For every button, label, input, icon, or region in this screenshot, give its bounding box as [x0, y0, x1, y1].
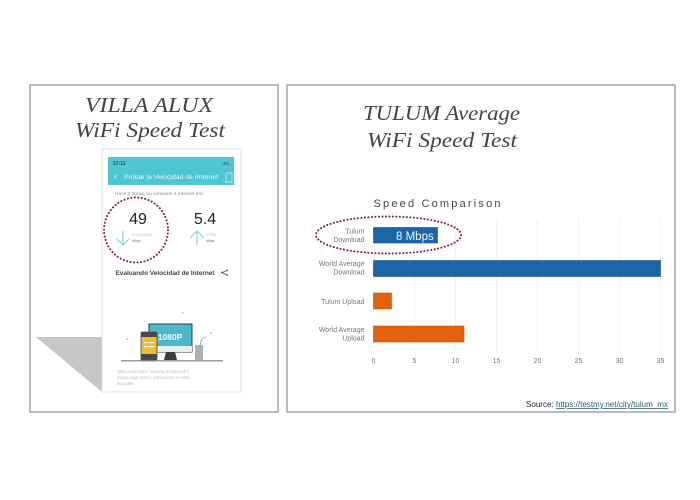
description text: música, jugar online y publicaciones en redes: [117, 375, 191, 380]
x axis ticks: 10: [452, 358, 459, 365]
description text: sociales: [117, 381, 134, 386]
download reading: 49: [129, 211, 147, 228]
category labels: [319, 228, 365, 342]
download reading: Descargar: [132, 232, 153, 237]
x axis ticks: 20: [534, 358, 541, 365]
category labels: Upload: [342, 336, 365, 342]
x axis ticks: 0: [372, 358, 376, 365]
panel: Tulum average: [287, 85, 675, 412]
category labels: Tulum: [345, 228, 365, 236]
last test caption: Hace 2 horas, su conexión a Internet era:: [115, 191, 204, 196]
app header bar: 4G: [223, 161, 229, 166]
x axis ticks: [372, 358, 664, 365]
section heading: [116, 270, 228, 277]
source note: Source: https://testmy.net/city/tulum_mx: [526, 400, 668, 409]
download reading: Mbps: [132, 239, 141, 243]
x axis ticks: 25: [575, 358, 582, 365]
upload reading: Subir: [206, 232, 217, 237]
download reading: [116, 211, 153, 245]
bar: Tulum download: [374, 228, 438, 243]
icon: devices illustration: [121, 312, 223, 362]
title: Tulum average WiFi speed test: [363, 101, 520, 152]
title: Tulum average WiFi speed test: TULUM Average: [363, 101, 520, 125]
category labels: Tulum Upload: [321, 299, 365, 306]
callout: dotted ellipse around Tulum download: [316, 216, 461, 254]
bar: Tulum download: 8 Mbps: [396, 231, 434, 243]
panel: Villa Alux: [30, 85, 278, 412]
app header bar: [108, 157, 234, 185]
bar: Tulum upload: [374, 293, 392, 309]
upload reading: [190, 211, 217, 245]
x axis ticks: 35: [657, 358, 664, 365]
phone screenshot: [102, 149, 241, 392]
app header bar: ‹: [114, 171, 117, 181]
category labels: Download: [333, 237, 365, 244]
callout: dotted circle around download: [104, 198, 168, 262]
app header bar: Probar la Velocidad de Internet: [124, 174, 218, 181]
x axis ticks: 15: [493, 358, 500, 365]
title: Villa Alux WiFi speed test: [75, 93, 226, 142]
title: Tulum average WiFi speed test: WiFi Speed Test: [367, 128, 518, 152]
description text: Datos pueden hacer streaming de videos HD y: [117, 369, 190, 374]
bar: World average download: [374, 260, 660, 276]
description text: [117, 369, 191, 386]
section heading: Evaluando Velocidad de Internet: [116, 271, 214, 277]
category labels: Download: [333, 270, 365, 276]
bar: World average upload: [374, 326, 464, 342]
bar chart: speed comparison: [319, 220, 664, 365]
upload reading: 5.4: [194, 211, 216, 228]
phone drop shadow: [36, 337, 102, 392]
category labels: World Average: [319, 327, 365, 334]
x axis ticks: 5: [413, 358, 417, 365]
app header bar: 17:11: [113, 161, 126, 167]
x axis ticks: 30: [616, 358, 623, 365]
title: Villa Alux WiFi speed test: WiFi Speed Test: [75, 118, 226, 142]
title: Villa Alux WiFi speed test: VILLA ALUX: [85, 93, 214, 117]
category labels: World Average: [319, 261, 365, 268]
icon: devices illustration: 1080P: [158, 332, 183, 342]
chart heading: Speed Comparison: [374, 198, 500, 210]
upload reading: Mbps: [206, 239, 215, 243]
